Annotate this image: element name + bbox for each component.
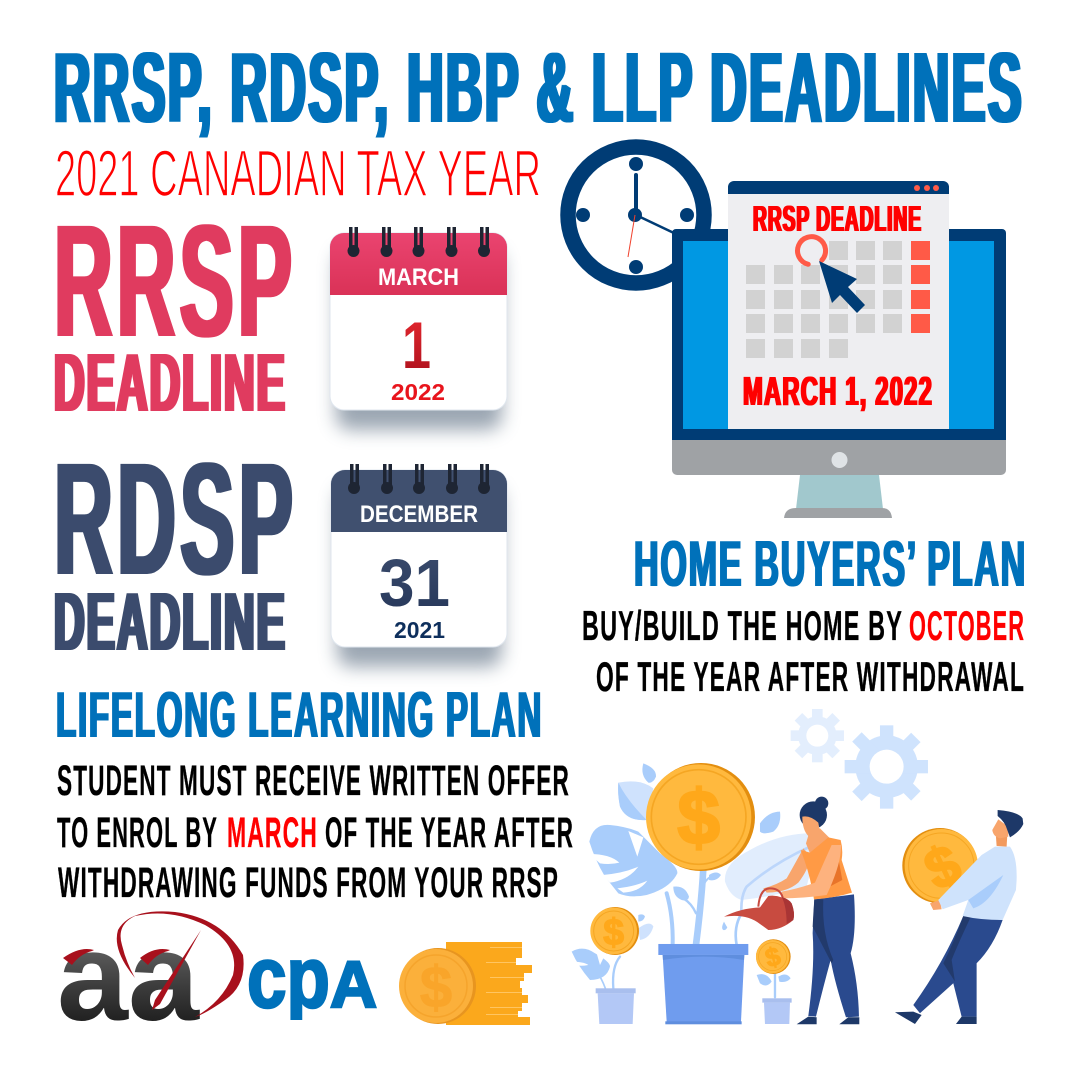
icon: large gear — [845, 725, 928, 809]
calendar rings — [348, 464, 490, 494]
illustration: money plants and people — [572, 709, 1023, 1024]
subtitle: 2021 CANADIAN TAX YEAR — [55, 136, 541, 210]
man carrying coin — [895, 810, 1023, 1024]
logo letters: aa — [57, 908, 201, 1047]
heading: RDSP deadline: DEADLINE — [54, 575, 287, 668]
heading: RRSP deadline: RRSP — [54, 191, 296, 370]
calendar: December 31 2021: DECEMBER — [360, 501, 478, 528]
calendar rings — [348, 227, 490, 257]
calendar: March 1 2022 — [330, 227, 507, 430]
small dollar coin right — [756, 939, 791, 974]
heading: RDSP deadline — [54, 429, 297, 668]
trousers — [913, 916, 1003, 1017]
calendar: March 1 2022: 1 — [402, 308, 431, 382]
shirt — [801, 837, 852, 899]
monitor with calendar page — [672, 181, 1006, 518]
date circle — [796, 236, 827, 265]
small plant leaves — [572, 949, 610, 980]
text: Lifelong Learning Plan rule: MARCH — [227, 809, 318, 857]
calendar day grid — [746, 241, 902, 358]
icon: small gear — [791, 709, 844, 762]
back arm — [763, 848, 811, 893]
text: Lifelong Learning Plan rule: STUDENT MUST RECEIVE WRITTEN OFFER — [57, 757, 570, 805]
calendar: March 1 2022: 2022 — [391, 379, 445, 405]
logo: aa CPA — [57, 908, 377, 1047]
small dollar coin right: $ — [762, 940, 784, 973]
man carrying coin: $ — [915, 833, 971, 903]
upper leaves — [618, 781, 653, 820]
page date: MARCH 1, 2022 — [743, 368, 933, 414]
woman watering — [763, 797, 859, 1024]
hand — [930, 900, 942, 910]
heading: RRSP deadline: DEADLINE — [54, 336, 287, 429]
neck — [996, 835, 1007, 847]
large monstera leaf — [589, 825, 677, 896]
chest skin — [806, 828, 830, 853]
heading: RDSP deadline: RDSP — [54, 429, 297, 608]
text: Lifelong Learning Plan rule: TO ENROL BY — [57, 809, 218, 857]
face — [992, 819, 1008, 838]
monitor stand — [796, 475, 883, 509]
icon: coin stack — [399, 942, 532, 1025]
logo swooshes — [63, 949, 94, 965]
heading: Lifelong Learning Plan: LIFELONG LEARNING PLAN — [56, 678, 543, 751]
text: Lifelong Learning Plan rule: OF THE YEAR AFTER — [325, 809, 574, 857]
monitor body — [672, 229, 1006, 440]
heading: RRSP deadline — [54, 191, 296, 429]
large plant pot — [658, 944, 748, 1024]
small pot left — [596, 988, 636, 1024]
cursor arrow — [819, 261, 865, 313]
text: Home Buyers' Plan rule — [582, 602, 1025, 700]
icon: wall clock — [568, 147, 704, 283]
text: Lifelong Learning Plan rule: WITHDRAWING FUNDS FROM YOUR RRSP — [58, 859, 559, 907]
text: Lifelong Learning Plan rule — [57, 757, 574, 907]
calendar page — [728, 194, 949, 429]
large dollar coin: $ — [677, 776, 720, 861]
sweater — [938, 847, 1017, 920]
pale leaf behind watering can — [725, 833, 813, 900]
calendar: March 1 2022: MARCH — [378, 264, 459, 291]
large dollar coin — [646, 763, 755, 871]
logo CPA: cp — [247, 930, 330, 1026]
icon: coin stack: $ — [420, 955, 452, 1020]
carried coin — [902, 828, 978, 903]
calendar: December 31 2021 — [331, 464, 507, 667]
trousers — [808, 894, 859, 1017]
hair — [998, 810, 1023, 837]
page label: RRSP DEADLINE — [753, 198, 922, 239]
highlighted days — [911, 241, 930, 333]
logo CPA: A — [330, 947, 377, 1021]
shirt pattern — [828, 860, 842, 887]
small dollar coin left: $ — [603, 910, 624, 952]
calendar: December 31 2021: 2021 — [394, 617, 445, 643]
front arm — [782, 845, 841, 898]
watering can — [722, 888, 794, 930]
plant stems — [597, 868, 775, 997]
face and hair — [800, 801, 827, 829]
small pot right — [762, 998, 792, 1024]
calendar: December 31 2021: 31 — [379, 546, 450, 621]
small dollar coin left — [590, 907, 639, 955]
